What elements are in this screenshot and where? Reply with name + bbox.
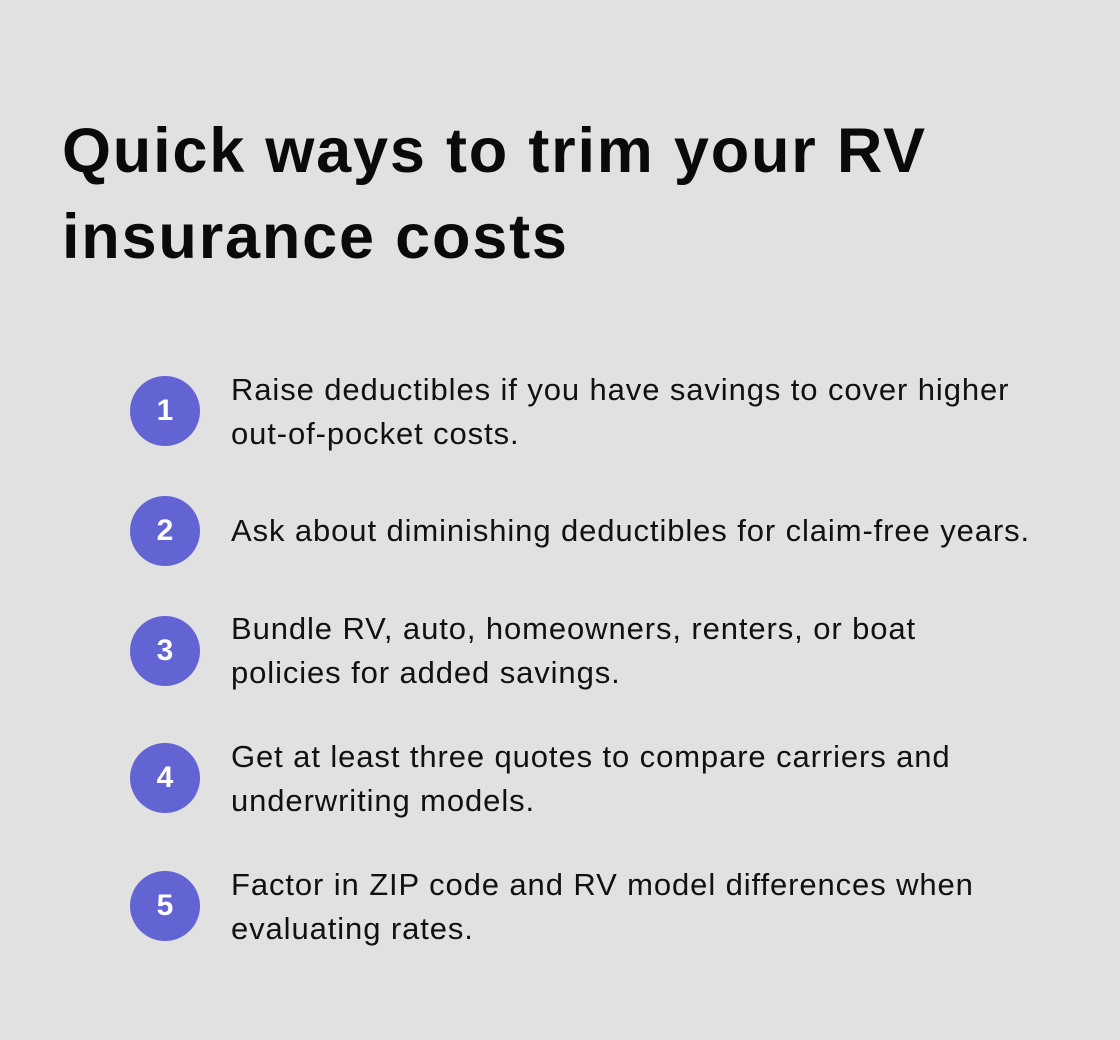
icon: number 2: 2 (157, 514, 173, 547)
icon: number 4: 4 (157, 761, 173, 794)
text 5: evaluating rates. (231, 911, 474, 946)
text 5 (231, 867, 974, 946)
icon: number 3: 3 (157, 634, 173, 667)
icon: number 2 (130, 496, 200, 566)
icon: number 5 (130, 871, 200, 941)
text 4: Get at least three quotes to compare carriers and (231, 739, 951, 774)
icon: number 4 (130, 743, 200, 813)
text 1 (231, 372, 1009, 451)
text 5: Factor in ZIP code and RV model differences when (231, 867, 974, 902)
text 4: underwriting models. (231, 783, 535, 818)
item 3 (130, 611, 916, 690)
item 5 (130, 867, 974, 946)
title: Quick ways to trim your RV (62, 116, 927, 186)
title (62, 116, 927, 272)
icon: number 1 (130, 376, 200, 446)
item 4 (130, 739, 951, 818)
text 1: Raise deductibles if you have savings to cover higher (231, 372, 1009, 407)
icon: number 1: 1 (157, 394, 173, 427)
item 2 (130, 496, 1030, 566)
icon: number 3 (130, 616, 200, 686)
text 3: Bundle RV, auto, homeowners, renters, or boat (231, 611, 916, 646)
item 1 (130, 372, 1009, 451)
text 1: out-of-pocket costs. (231, 416, 520, 451)
text 4 (231, 739, 951, 818)
text 2: Ask about diminishing deductibles for claim-free years. (231, 513, 1030, 548)
text 3: policies for added savings. (231, 655, 621, 690)
title: insurance costs (62, 202, 569, 272)
text 3 (231, 611, 916, 690)
icon: number 5: 5 (157, 889, 173, 922)
